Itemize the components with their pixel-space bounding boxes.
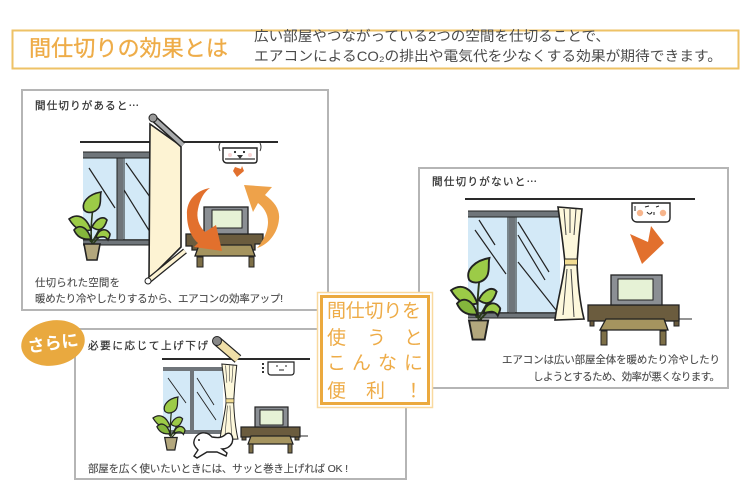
television and stand: [186, 207, 263, 250]
dark orange arrow: [187, 188, 222, 251]
panel heading: 間仕切りがないと…: [432, 174, 537, 189]
small air arrow: [233, 166, 244, 177]
coffee table: [248, 436, 293, 453]
dog: [194, 433, 233, 458]
ceiling line: [80, 141, 278, 143]
header banner: [12, 28, 738, 68]
plant: [451, 258, 500, 340]
caption: 暖めたり冷やしたりするから、エアコンの効率アップ!: [35, 292, 283, 305]
rolled-up screen: [212, 336, 238, 359]
floor line: [588, 318, 692, 320]
air conditioner: [219, 143, 261, 163]
callout: handy: こ: [327, 353, 346, 374]
callout: handy: 間仕切りを: [327, 300, 421, 322]
caption: 部屋を広く使いたいときには、サッと巻き上げれば OK !: [88, 462, 348, 475]
air conditioner: [263, 362, 294, 375]
heading: 間仕切りの効果とは: [29, 36, 228, 61]
badge: sarani: さらに: [26, 331, 80, 356]
panel heading: 必要に応じて上げ下げ: [88, 339, 208, 352]
intro text: エアコンによるCO₂の排出や電気代を少なくする効果が期待できます。: [254, 48, 722, 64]
ceiling line: [162, 358, 310, 360]
callout: handy: と: [404, 328, 423, 349]
caption: [35, 276, 283, 305]
window: [468, 211, 560, 318]
intro text: [254, 28, 722, 64]
television and stand: [241, 407, 300, 440]
callout: handy: ん: [352, 353, 371, 374]
orange arrow: [630, 226, 664, 264]
panel: without partition: [419, 168, 728, 388]
panel: raise and lower: [75, 329, 406, 479]
curtain: [555, 207, 584, 320]
roller screen partition: [145, 114, 185, 284]
coffee table: [600, 319, 668, 345]
caption: しようとするため、効率が悪くなります。: [533, 370, 720, 383]
television and stand: [588, 275, 679, 326]
plant: [153, 397, 185, 450]
coffee table: [195, 245, 255, 267]
curtain: [220, 364, 238, 440]
intro text: 広い部屋やつながっている2つの空間を仕切ることで、: [254, 28, 610, 44]
plant: [69, 192, 110, 260]
panel heading: 間仕切りがあると…: [35, 98, 139, 113]
panel: with partition: [22, 90, 328, 310]
callout: handy: な: [378, 353, 397, 374]
caption: 仕切られた空間を: [35, 276, 120, 289]
callout: handy: に: [404, 353, 423, 374]
air conditioner: [632, 203, 670, 222]
callout: handy: 便: [327, 380, 346, 402]
callout: handy: 使: [327, 327, 346, 349]
callout: handy: [318, 292, 432, 408]
caption: エアコンは広い部屋全体を暖めたり冷やしたり: [502, 353, 720, 366]
callout: handy: 利: [366, 380, 385, 402]
window: [163, 367, 223, 434]
badge: sarani: [18, 315, 88, 371]
callout: handy: ！: [404, 381, 423, 402]
ceiling line: [465, 198, 695, 200]
light orange arrow: [244, 185, 279, 248]
caption: [502, 353, 720, 383]
window: [83, 152, 151, 245]
callout: handy: う: [367, 328, 386, 349]
floor line: [300, 435, 308, 437]
